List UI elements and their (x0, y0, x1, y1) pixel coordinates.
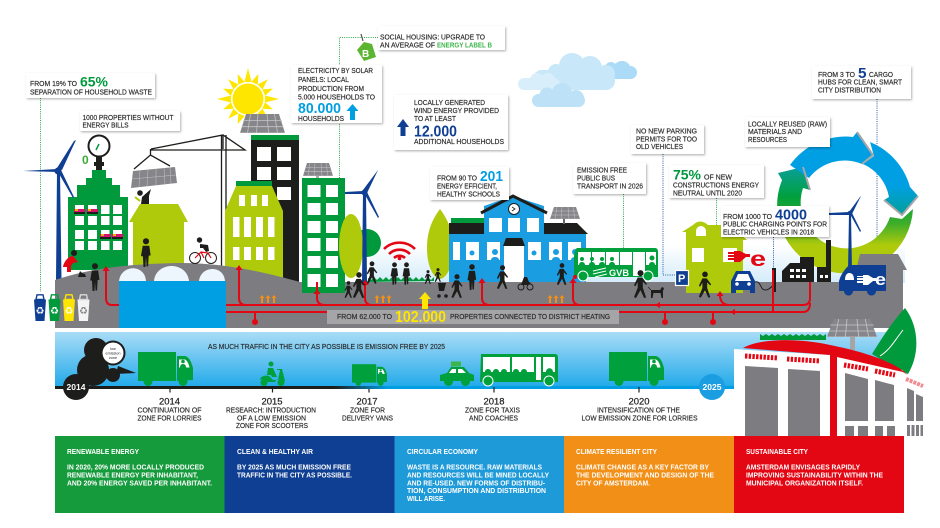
station facade (734, 340, 923, 436)
label: wind energy: LOCALLY GENERATED (414, 98, 485, 107)
panel: circular economy: TION, CONSUMPTION AND DISTRIBUTION (407, 486, 546, 495)
label: charging points: 4000 (775, 206, 807, 224)
timeline item 2015: OF A LOW EMISSION (237, 413, 306, 422)
timeline item 2017 (342, 396, 393, 422)
clouds (518, 53, 637, 107)
label: cargo hubs: FROM 3 TO (818, 70, 855, 79)
label: cargo hubs (812, 65, 911, 99)
GVB bus (574, 248, 658, 281)
label: reused materials: LOCALLY REUSED (RAW) (748, 120, 827, 128)
panel: climate resilient city: CITY OF AMSTERDAM. (576, 478, 650, 488)
timeline item 2014: ZONE FOR LORRIES (138, 413, 202, 422)
label: social housing: SOCIAL HOUSING: UPGRADE TO (380, 32, 485, 42)
wind turbine left (23, 140, 76, 280)
label: public bus: EMISSION FREE (577, 166, 627, 174)
label: parking permits (631, 125, 704, 154)
district heating pipes (102, 265, 810, 325)
label: household waste: SEPARATION OF HOUSEHOLD WASTE (30, 88, 152, 96)
panel: renewable energy: RENEWABLE ENERGY PER INHABITANT, (67, 470, 198, 480)
panel: renewable energy (55, 436, 224, 513)
label: solar panels: PRODUCTION FROM (298, 84, 364, 93)
2014 marker: 2014 (67, 382, 86, 392)
district heating bar: PROPERTIES CONNECTED TO DISTRICT HEATING (450, 312, 610, 321)
wifi symbol (384, 243, 415, 260)
timeline item 2015: RESEARCH: INTRODUCTION (226, 405, 316, 414)
electric cargo van (839, 265, 886, 296)
canal and bridge (119, 266, 226, 328)
wind turbine right (829, 196, 861, 272)
sun (217, 68, 279, 125)
panel: clean and healthy air: CLEAN & HEALTHY AIR (237, 447, 314, 456)
dotted leader lines (40, 38, 877, 292)
panel: sustainable city (734, 436, 904, 513)
district heating bar (327, 309, 619, 326)
low emission zone timeline band (55, 332, 903, 388)
bins: ♻ (50, 306, 59, 317)
panel: circular economy: WASTE IS A RESOURCE. RAW MATERIALS (407, 462, 542, 472)
sky glow behind the street (370, 245, 905, 283)
timeline item 2018: ZONE FOR TAXIS (465, 405, 520, 414)
electric car and charger (731, 268, 776, 293)
solar panel on green tower (303, 163, 333, 176)
label: new constructions: 75% (673, 168, 701, 182)
parking sign (676, 270, 688, 286)
label: new constructions: OF NEW (704, 172, 732, 182)
label: schools (430, 167, 509, 200)
bins: ♻ (79, 306, 88, 317)
smoke cloud with low emission zone badge (77, 338, 136, 386)
rooftop solar panel on black tower (240, 114, 285, 133)
label: reused materials: RESOURCES (748, 135, 787, 144)
lorry 2014 (138, 352, 193, 386)
label: energy bills: ENERGY BILLS (82, 120, 129, 130)
label: charging points (721, 206, 829, 237)
label: public bus: TRANSPORT IN 2026 (577, 182, 643, 190)
smoke cloud with low emission zone badge: emission (106, 352, 120, 356)
panel: circular economy: CIRCULAR ECONOMY (407, 447, 478, 456)
label: solar panels: ELECTRICITY BY SOLAR (298, 66, 373, 75)
label: reused materials (745, 117, 830, 147)
label: social housing: ENERGY LABEL B (437, 40, 492, 50)
2014 marker (63, 374, 89, 400)
panel: renewable energy: AND 20% ENERGY SAVED PER INHABITANT. (67, 478, 212, 488)
parking sign: P (678, 273, 685, 285)
label: energy bills (80, 111, 180, 131)
2025 marker: 2025 (703, 382, 722, 392)
label: household waste: FROM 19% TO (30, 79, 77, 88)
2025 marker (699, 374, 725, 400)
woman with cat (63, 250, 86, 277)
factory (782, 240, 831, 282)
panel: climate resilient city (564, 436, 734, 513)
label: charging points: PUBLIC CHARGING POINTS FOR (723, 220, 827, 228)
timeline item 2018 (465, 396, 520, 422)
label: new constructions: NEUTRAL UNTIL 2020 (673, 188, 742, 198)
panel: sustainable city: IMPROVING SUSTAINABILITY WITHIN THE (746, 470, 883, 480)
timeline item 2017: DELIVERY VANS (342, 413, 393, 422)
smoke cloud with low emission zone badge: zone (109, 356, 117, 360)
label: schools: 201 (480, 168, 503, 185)
timeline item 2020: LOW EMISSION ZONE FOR LORRIES (582, 413, 698, 422)
cyclist (190, 237, 216, 264)
label: reused materials: MATERIALS AND (748, 127, 802, 136)
label: schools: FROM 90 TO (437, 174, 477, 182)
electric cargo van: e (875, 270, 886, 289)
coach (480, 354, 558, 386)
solar panel on school (550, 207, 580, 219)
timeline item 2020: INTENSIFICATION OF THE (597, 405, 680, 414)
school (449, 196, 588, 282)
circular economy arrows (777, 132, 918, 273)
scooter (260, 362, 285, 386)
panel: climate resilient city: CLIMATE CHANGE AS A KEY FACTOR BY (576, 462, 709, 472)
label: public bus (573, 163, 646, 194)
orange heat arrows (260, 295, 564, 303)
solar panel on station (827, 319, 877, 337)
timeline item 2018: 2018 (484, 396, 504, 406)
lime house with electric plug: e (750, 248, 766, 271)
panel: clean and healthy air: BY 2025 AS MUCH EMISSION FREE (237, 462, 351, 472)
label: wind energy (394, 95, 508, 150)
label: new constructions: CONSTRUCTIONS ENERGY (673, 180, 759, 190)
timeline title: AS MUCH TRAFFIC IN THE CITY AS POSSIBLE IS EMISSION FREE BY 2025 (208, 342, 445, 351)
label: parking permits: PERMITS FOR TOO (636, 134, 697, 144)
label: parking permits: OLD VEHICLES (636, 142, 683, 151)
label: wind energy: TO AT LEAST (414, 114, 456, 123)
GVB bus: GVB (609, 268, 629, 278)
label: solar panels: HOUSEHOLDS (298, 114, 344, 123)
panel: circular economy: AND RESOURCES WILL BE MINED LOCALLY (407, 470, 549, 480)
canal house with gauge (68, 136, 128, 270)
park grass (368, 277, 434, 282)
timeline item 2018: AND COACHES (469, 413, 518, 422)
timeline axis (55, 386, 735, 392)
label: charging points: FROM 1000 TO (723, 212, 772, 221)
panel: circular economy: WILL ARISE. (407, 494, 445, 503)
panel: renewable energy: IN 2020, 20% MORE LOCALLY PRODUCED (67, 462, 204, 472)
panel: clean and healthy air (224, 436, 394, 513)
timeline item 2014: 2014 (159, 396, 180, 406)
green tower (302, 175, 345, 293)
label: cargo hubs: CARGO (869, 70, 893, 79)
lime apartment building (225, 181, 283, 280)
label: wind energy: 12.000 (414, 124, 457, 140)
label: parking permits: NO NEW PARKING (636, 126, 697, 136)
label: cargo hubs: CITY DISTRIBUTION (818, 86, 881, 94)
grass and post behind station (760, 334, 855, 351)
label: wind energy: WIND ENERGY PROVIDED (414, 106, 499, 115)
district heating bar: 102.000 (395, 309, 446, 326)
label: social housing: AN AVERAGE OF (380, 40, 435, 50)
stroller, tricycle and dog (437, 275, 664, 298)
panel: sustainable city: AMSTERDAM ENVISAGES RAPIDLY (746, 462, 860, 472)
people silhouettes (90, 238, 711, 298)
yellow up arrow (419, 292, 431, 309)
panel: climate resilient city: CLIMATE RESILIENT CITY (576, 447, 657, 456)
lorry 2020 (609, 352, 664, 386)
lime house with roof worker (129, 189, 188, 268)
van 2017 (352, 364, 387, 386)
district heating bar: FROM 62.000 TO (337, 312, 392, 321)
timeline item 2017: ZONE FOR (350, 405, 385, 414)
timeline item 2020 (582, 396, 698, 422)
timeline item 2017: 2017 (356, 396, 378, 406)
label: solar panels: PANELS: LOCAL (298, 75, 349, 84)
label: wind energy: ADDITIONAL HOUSEHOLDS (414, 137, 504, 146)
panel: clean and healthy air: TRAFFIC IN THE CITY AS POSSIBLE. (237, 470, 352, 480)
lime house with electric plug (682, 222, 766, 293)
label: cargo hubs: HUBS FOR CLEAN, SMART (818, 78, 902, 86)
panel: renewable energy: RENEWABLE ENERGY (67, 447, 139, 456)
timeline item 2015: 2015 (262, 396, 282, 406)
label: new constructions (669, 165, 764, 198)
social housing label tag (357, 34, 376, 61)
timeline item 2014 (138, 396, 202, 422)
label: schools: HEALTHY SCHOOLS (437, 190, 500, 198)
crane with solar panel (131, 135, 245, 270)
label: charging points: ELECTRIC VEHICLES IN 2018 (723, 228, 814, 236)
label: solar panels (291, 65, 382, 123)
bins: ♻ (36, 306, 45, 317)
label: household waste (26, 73, 155, 98)
canal house with gauge: 0 (82, 153, 89, 167)
lime tree (427, 209, 453, 279)
panel: sustainable city: SUSTAINABLE CITY (746, 447, 808, 456)
panel: circular economy: AND RE-USED. NEW FORMS OF DISTRIBU- (407, 478, 546, 488)
taxi (440, 362, 474, 386)
social housing label tag: B (362, 49, 369, 60)
wind turbine center (345, 168, 379, 282)
smoke cloud with low emission zone badge: low (110, 347, 116, 351)
timeline item 2020: 2020 (628, 396, 650, 406)
panel: circular economy (394, 436, 564, 513)
timeline item 2015: ZONE FOR SCOOTERS (236, 421, 308, 430)
panel: sustainable city: MUNICIPAL ORGANIZATION ITSELF. (746, 478, 863, 488)
label: solar panels: 80.000 (298, 100, 341, 117)
black tower (251, 135, 299, 282)
label: household waste: 65% (80, 74, 108, 90)
label: cargo hubs: 5 (858, 65, 866, 82)
panel: climate resilient city: THE DEVELOPMENT AND DESIGN OF THE (576, 470, 714, 480)
label: public bus: PUBLIC BUS (577, 174, 615, 182)
park trees (339, 214, 381, 278)
bins: ♻ (65, 306, 74, 317)
timeline item 2015 (226, 396, 316, 430)
bins (34, 295, 90, 321)
label: schools: ENERGY EFFICIENT, (437, 182, 497, 190)
label: solar panels: 5.000 HOUSEHOLDS TO (298, 92, 375, 102)
ground (55, 254, 907, 328)
leaf (872, 308, 916, 374)
timeline item 2014: CONTINUATION OF (138, 405, 202, 414)
label: energy bills: 1000 PROPERTIES WITHOUT (82, 113, 174, 122)
label: social housing (378, 26, 505, 50)
